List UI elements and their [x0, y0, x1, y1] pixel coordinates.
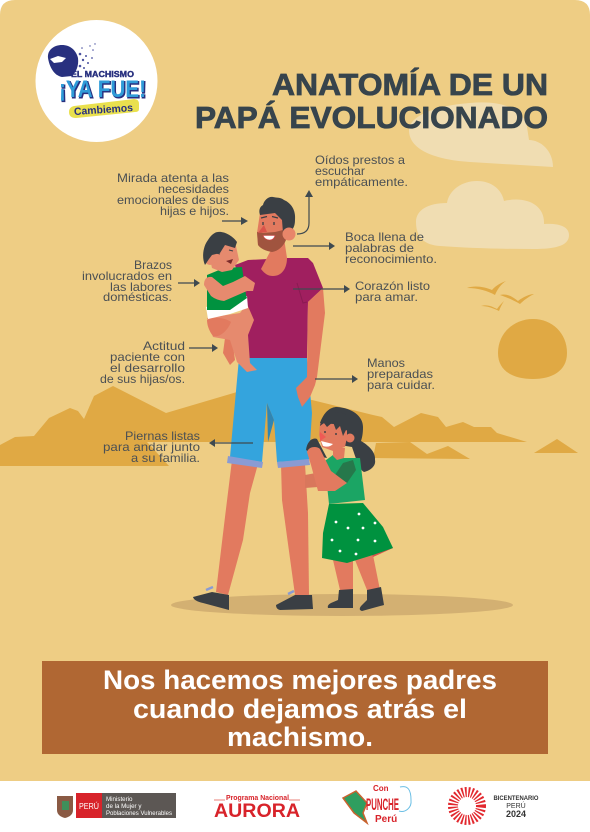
left shoe: [193, 592, 229, 610]
label: mirada: emocionales de sus: [117, 193, 229, 207]
socks and shoes: [328, 587, 384, 611]
logo: con puche peru: Perú: [375, 814, 397, 825]
logo: aurora: AURORA: [214, 801, 300, 822]
footer: [0, 781, 590, 832]
label: actitud: paciente con: [110, 350, 185, 364]
arrow: corazon: [293, 285, 350, 293]
logo: bicentenario: PERÚ: [506, 801, 526, 810]
baby back foot: [223, 338, 235, 365]
ear: [282, 228, 296, 240]
label: brazos: domésticas.: [103, 290, 172, 304]
label: brazos: involucrados en: [82, 269, 172, 283]
skirt: [322, 503, 393, 563]
face: [319, 423, 347, 451]
eyes: [325, 431, 336, 435]
beard: [257, 230, 286, 252]
cloud: lower: [416, 181, 569, 249]
father figure: [193, 197, 325, 610]
baby arm: [204, 276, 255, 301]
title: PAPÁ EVOLUCIONADO: [195, 100, 548, 135]
logo: con puche peru: [343, 784, 411, 825]
baby head: [208, 240, 239, 272]
arrow: manos: [315, 375, 358, 383]
ground shadow: [171, 594, 513, 616]
arrow: boca: [293, 242, 335, 250]
neck: [333, 448, 345, 460]
label: manos: Manos: [367, 356, 405, 370]
label: boca: reconocimiento.: [345, 252, 437, 266]
neck and collar: [261, 238, 287, 276]
label: brazos: las labores: [110, 280, 172, 294]
logo: bicentenario: BICENTENARIO: [494, 796, 539, 802]
label: oidos: escuchar: [315, 164, 365, 178]
left leg: [216, 460, 258, 595]
baby leg: [207, 304, 257, 372]
label: corazon: Corazón listo: [355, 279, 430, 293]
label: mirada: Mirada atenta a las: [117, 171, 229, 185]
polka dots: [331, 513, 376, 555]
logo: bicentenario: [453, 792, 539, 820]
label: actitud: Actitud: [143, 339, 185, 353]
label: brazos: Brazos: [134, 258, 172, 272]
cloud: upper: [409, 102, 553, 167]
nose: [258, 225, 267, 233]
blouse: [322, 455, 365, 504]
label: manos: [367, 356, 435, 392]
nose: [320, 432, 326, 441]
skirt lining: [370, 540, 393, 557]
shorts: [230, 358, 312, 462]
logo: con puche peru: Con: [373, 784, 389, 793]
label: corazon: para amar.: [355, 290, 418, 304]
label: actitud: de sus hijas/os.: [100, 372, 185, 386]
legs: [333, 555, 380, 590]
mountains: [0, 386, 578, 466]
label: mirada: hijas e hijos.: [160, 204, 229, 218]
logo: ministerio: [57, 793, 176, 818]
logo: ministerio: PERÚ: [79, 802, 99, 811]
diaper: [206, 296, 248, 319]
arm: [296, 288, 325, 407]
fringe: [320, 412, 352, 436]
banner: machismo.: [227, 722, 373, 752]
logo: El machismo ya fue: [36, 20, 158, 142]
shirt fold: [297, 283, 307, 303]
baby figure: [203, 232, 257, 372]
hair back: [320, 407, 375, 472]
title: [195, 67, 548, 135]
logo: El machismo ya fue: ¡YA FUE!: [59, 76, 146, 103]
hair: [259, 197, 295, 233]
mouth: [263, 236, 275, 240]
logo: El machismo ya fue: EL MACHISMO: [71, 69, 134, 79]
label: boca: palabras de: [345, 241, 414, 255]
label: actitud: el desarrollo: [110, 361, 185, 375]
logo: El machismo ya fue: Cambiemos: [74, 102, 133, 118]
arrow: actitud: [189, 344, 218, 352]
banner: [42, 661, 548, 754]
laces: [206, 587, 294, 594]
back arm: [305, 473, 318, 488]
sleeve: [335, 460, 356, 483]
label: piernas: para andar junto: [103, 440, 200, 454]
logo: ministerio: Poblaciones Vulnerables: [106, 810, 172, 817]
eyes: [261, 216, 278, 225]
label: corazon: [355, 279, 430, 304]
label: brazos: [82, 258, 172, 304]
label: oidos: empáticamente.: [315, 175, 408, 189]
label: piernas: [103, 429, 200, 465]
label: oidos: Oídos prestos a: [315, 153, 405, 167]
mouth: [321, 441, 333, 447]
logo: El machismo ya fue: ¡YA FUE!: [60, 77, 147, 104]
label: mirada: [117, 171, 229, 218]
right leg: [281, 464, 309, 595]
birds: [467, 281, 534, 311]
arrow: oidos: [297, 190, 313, 234]
label: actitud: [100, 339, 185, 386]
label: manos: para cuidar.: [367, 378, 435, 392]
label: piernas: Piernas listas: [125, 429, 200, 443]
label: boca: [345, 230, 437, 266]
baby eyes: [216, 250, 233, 254]
sun: [498, 319, 567, 379]
logo: bicentenario: 2024: [506, 809, 526, 819]
arrow: mirada: [222, 217, 248, 225]
label: piernas: a su familia.: [131, 451, 200, 465]
label: boca: Boca llena de: [345, 230, 424, 244]
baby body: [207, 267, 247, 310]
baby hair: [203, 232, 237, 265]
arrow: brazos: [178, 279, 200, 287]
arrow: piernas: [209, 439, 253, 447]
logo: aurora: [214, 793, 300, 822]
right shoe: [276, 595, 313, 610]
banner: cuando dejamos atrás el: [133, 694, 467, 724]
logo: ministerio: de la Mujer y: [106, 803, 142, 810]
label: oidos: [315, 153, 408, 189]
logo: aurora: Programa Nacional: [226, 793, 289, 802]
title: ANATOMÍA DE UN: [272, 67, 548, 102]
shorts hems: [227, 456, 310, 468]
front arm and hands: [307, 447, 347, 491]
baby mouth: [226, 259, 233, 264]
banner: Nos hacemos mejores padres: [103, 665, 497, 695]
shirt: [235, 258, 323, 358]
logo: ministerio: Ministerio: [106, 796, 133, 803]
girl figure: [305, 407, 393, 611]
head: [257, 212, 291, 252]
logo: con puche peru: PUNCHE: [366, 795, 399, 814]
label: mirada: necesidades: [158, 182, 229, 196]
label: manos: preparadas: [367, 367, 433, 381]
